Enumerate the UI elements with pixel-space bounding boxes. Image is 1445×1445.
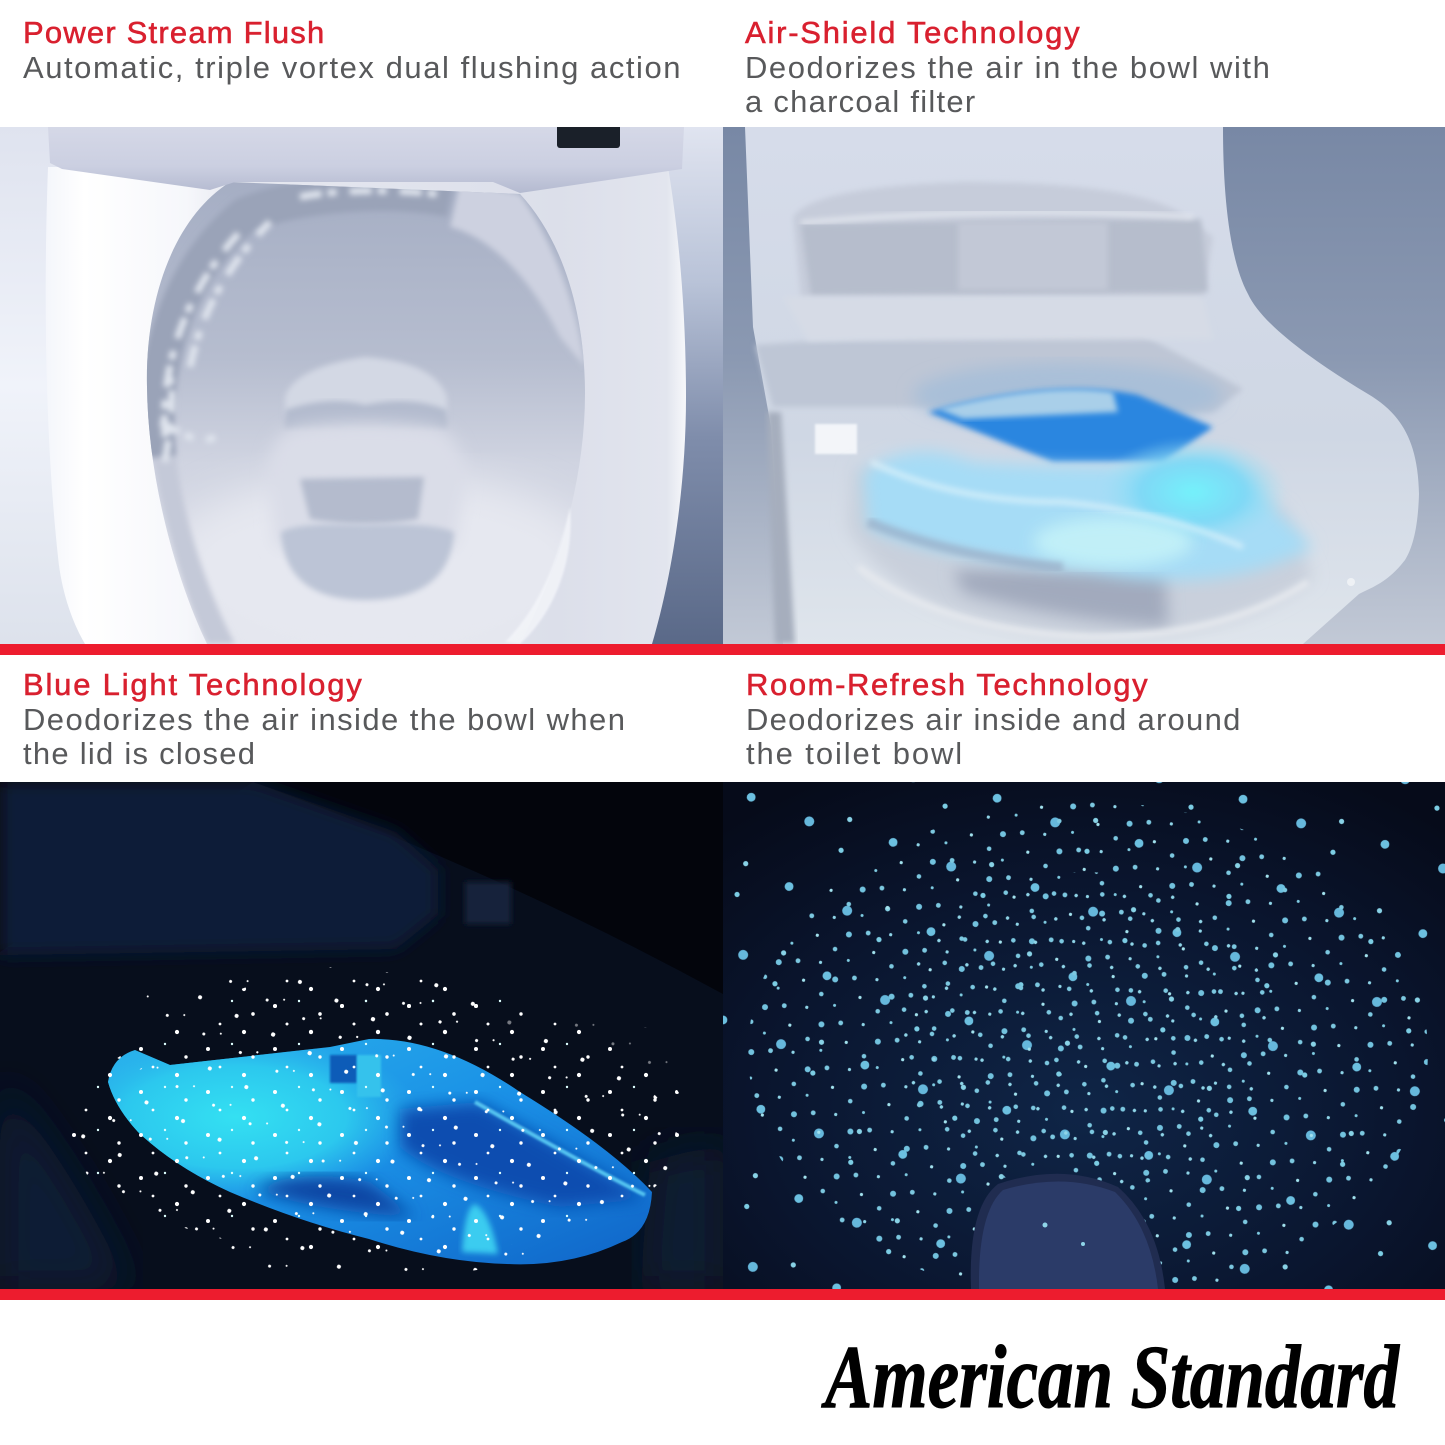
drain area (268, 357, 465, 600)
seat lower shell (848, 467, 1313, 639)
display button (557, 123, 620, 148)
panel: power stream flush text (23, 15, 682, 85)
toilet silhouette (971, 1174, 1165, 1289)
particles (70, 967, 690, 1277)
photo: air shield toilet (723, 127, 1445, 644)
photo: room refresh particles (723, 782, 1445, 1289)
panel: room-refresh text (746, 667, 1242, 771)
bowl (146, 182, 585, 644)
text: blue light description: Deodorizes the air inside the bowl when (23, 702, 626, 737)
glowing bowl (108, 1038, 652, 1264)
toilet body (46, 167, 686, 644)
text: blue light description (23, 702, 626, 771)
divider bar: top (0, 644, 1445, 655)
water foam band (156, 191, 450, 462)
photo: toilet bowl flushing (0, 127, 723, 644)
hinge knobs (1347, 578, 1355, 586)
hinge (465, 882, 511, 924)
particles (723, 782, 1445, 1302)
air swirl glow (863, 363, 1313, 580)
text: air-shield description: Deodorizes the air in the bowl with (745, 50, 1271, 85)
heading: power stream flush: Power Stream Flush (23, 15, 325, 50)
seat layer (755, 334, 1243, 412)
heading: room-refresh technology: Room-Refresh Technology (746, 667, 1149, 702)
text: power stream flush description: Automatic, triple vortex dual flushing action (23, 50, 682, 85)
heading: blue light technology: Blue Light Technology (23, 667, 364, 702)
water splash right (505, 507, 571, 644)
toilet lid in shadow (0, 782, 438, 955)
text: air-shield description (745, 50, 1271, 119)
heading: air-shield technology: Air-Shield Technology (745, 15, 1081, 50)
text: air-shield description: a charcoal filter (745, 84, 976, 119)
divider bar: bottom (0, 1289, 1445, 1300)
text: room-refresh description: the toilet bowl (746, 736, 964, 771)
panel: air-shield text (744, 15, 1271, 119)
toilet body (745, 127, 1419, 644)
bowl surround (0, 782, 723, 1289)
tank lid (48, 127, 684, 193)
text: room-refresh description (746, 702, 1242, 771)
side line (767, 412, 795, 644)
panel: blue light text (23, 667, 626, 771)
text: room-refresh description: Deodorizes air inside and around (746, 702, 1242, 737)
tank interior (793, 182, 1213, 297)
text: blue light description: the lid is closed (23, 736, 256, 771)
white block (815, 424, 857, 454)
photo: blue light bowl (0, 782, 723, 1289)
